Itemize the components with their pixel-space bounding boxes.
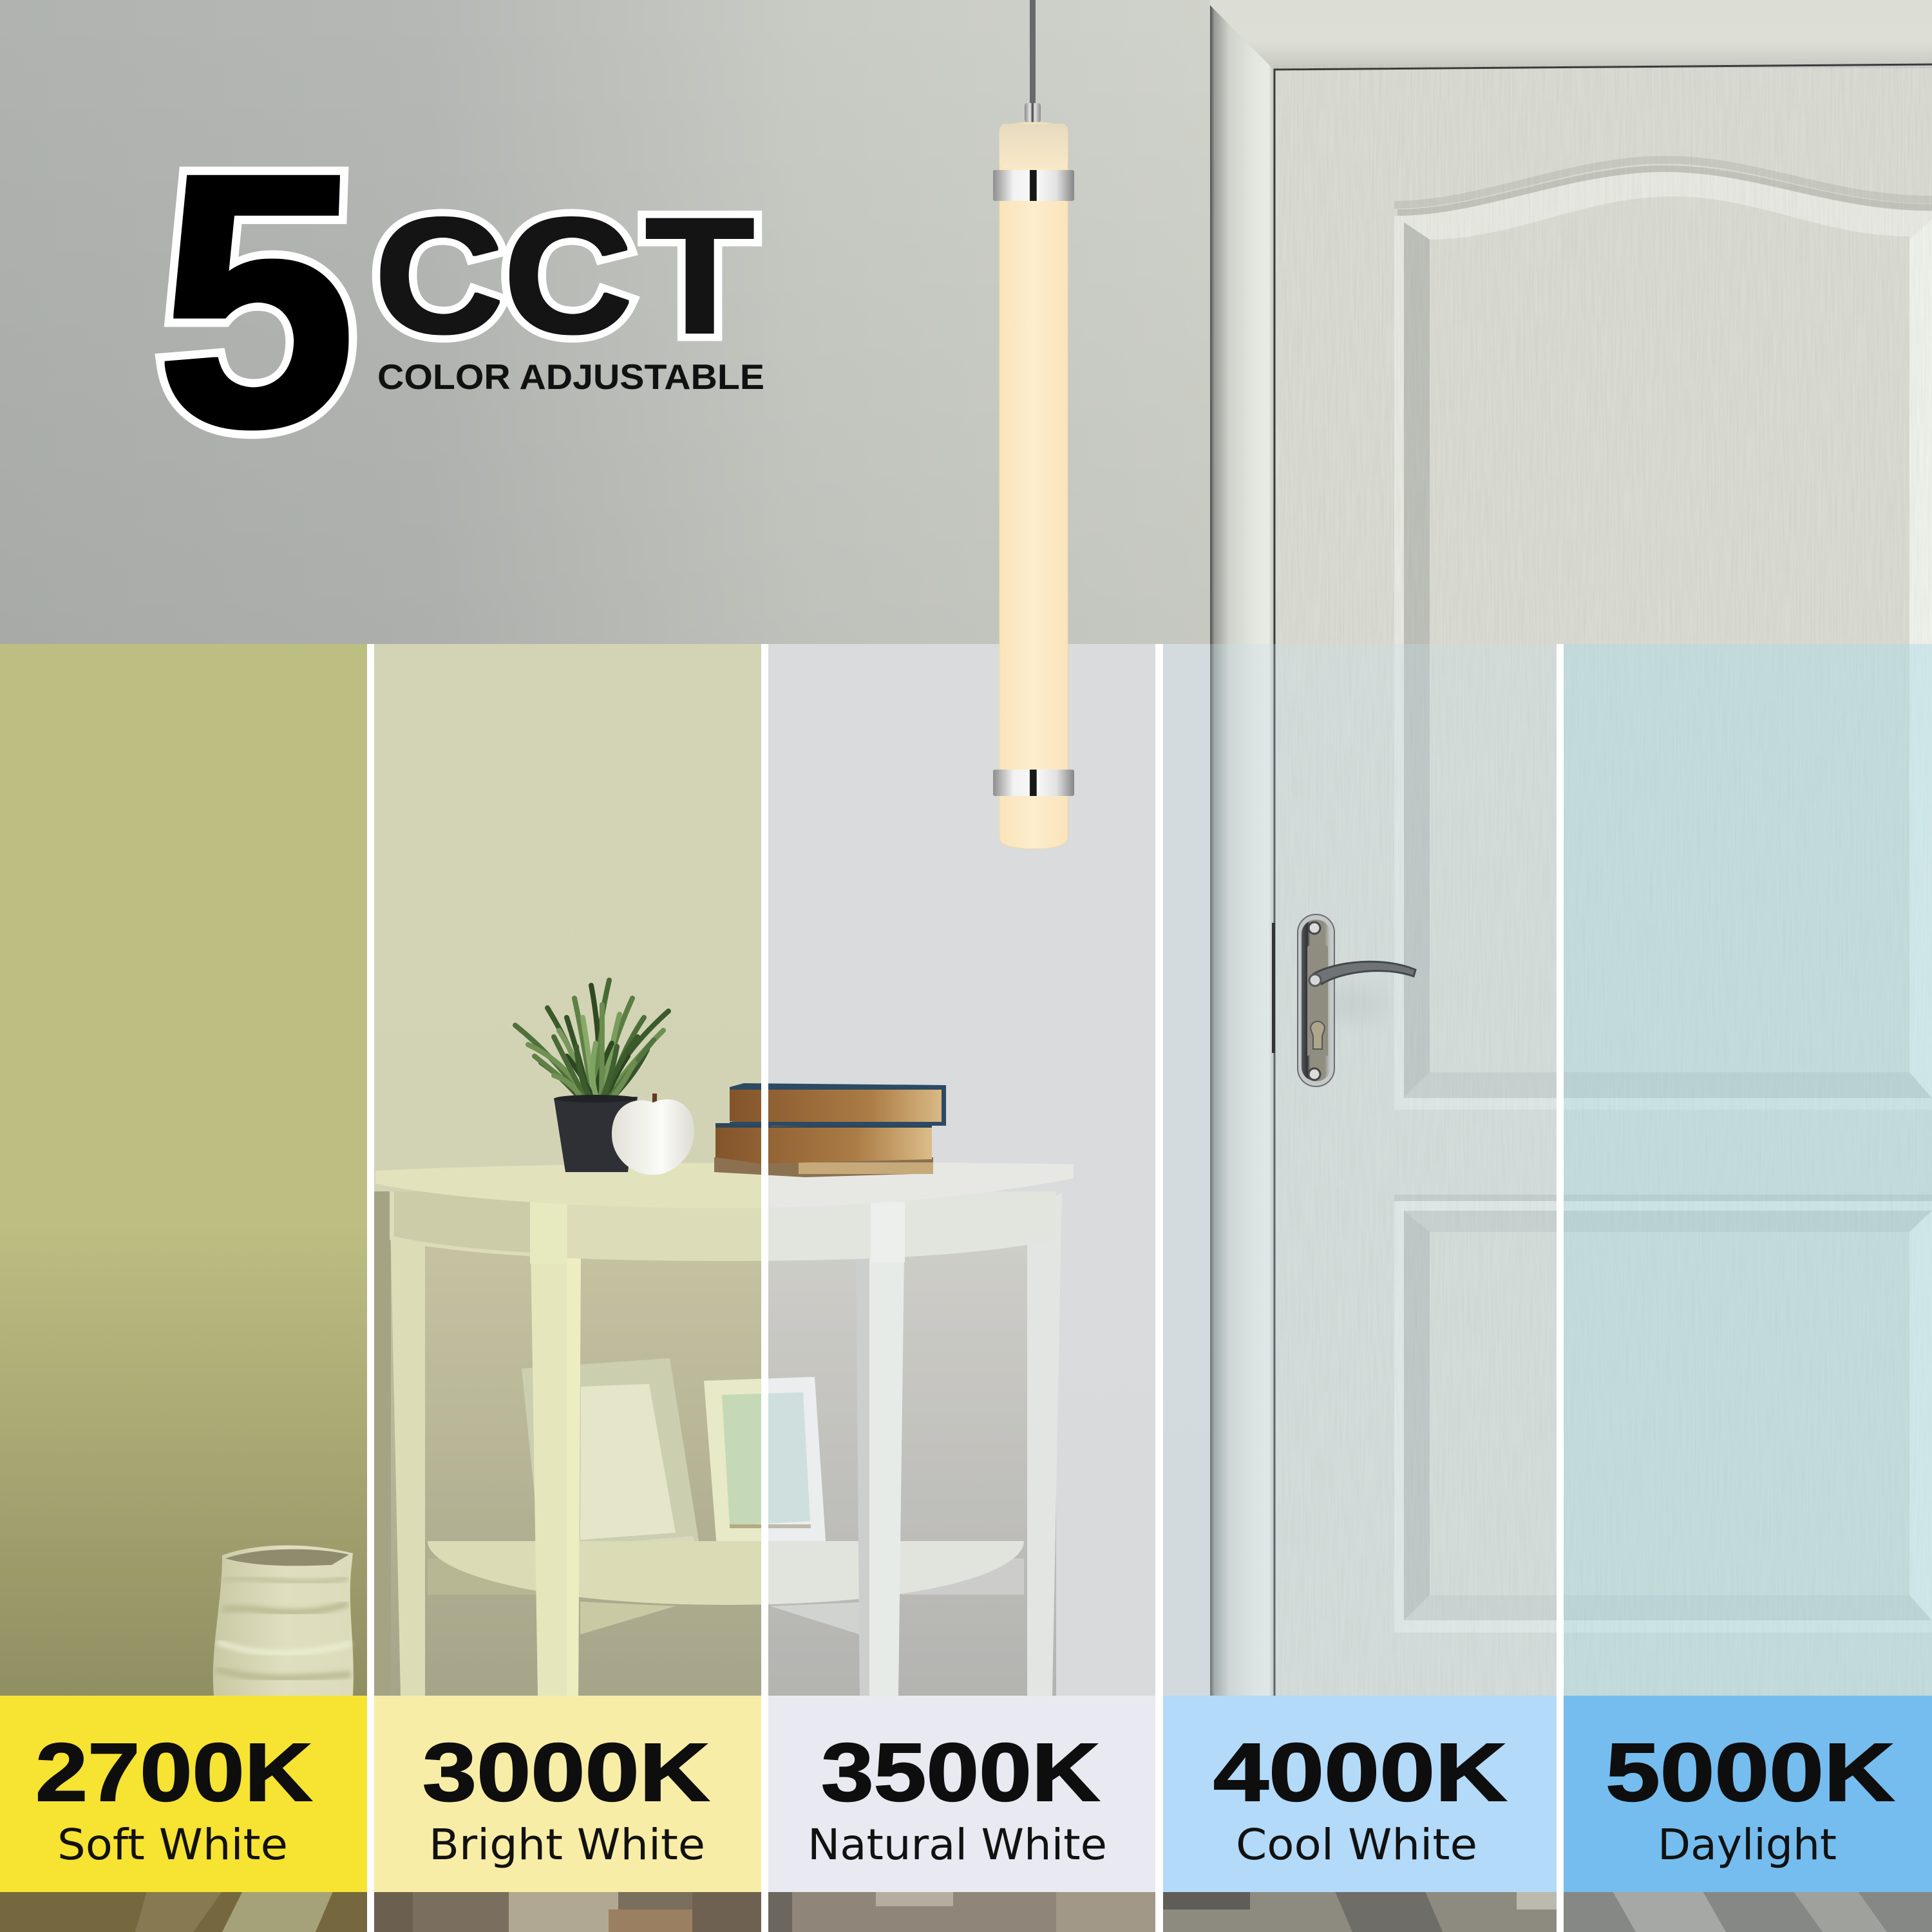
framed picture: white stand frame bbox=[704, 1377, 827, 1565]
overlay: 3500K bbox=[768, 644, 1155, 1700]
cord bbox=[1030, 0, 1036, 104]
vase bbox=[213, 1546, 354, 1696]
glass tube bbox=[999, 122, 1068, 849]
pendant light bbox=[993, 0, 1074, 849]
top ring bbox=[993, 170, 1074, 201]
bar 5000K bbox=[1564, 1696, 1932, 1892]
framed picture: silver frame bbox=[522, 1358, 701, 1568]
numeral 5: 5 bbox=[151, 99, 365, 502]
bar 3000K: 3000K bbox=[422, 1727, 710, 1819]
bar 3500K: Natural White bbox=[808, 1820, 1107, 1870]
overlay: 4000K bbox=[1163, 644, 1557, 1700]
table top bbox=[375, 1162, 1074, 1208]
CCT: CCT bbox=[374, 184, 755, 367]
handle shadow bbox=[1323, 987, 1388, 1023]
book 1 bbox=[730, 1088, 946, 1126]
bar 3000K bbox=[374, 1696, 761, 1892]
floor bbox=[0, 1887, 1932, 1932]
overlay: 5000K bbox=[1564, 644, 1932, 1700]
lower shelf bbox=[428, 1541, 1024, 1605]
blades bbox=[515, 980, 668, 1098]
table under-shadow on wall bbox=[390, 1243, 1056, 1700]
door leaf bbox=[1274, 68, 1932, 1700]
legs bbox=[390, 1193, 1062, 1696]
canopy cap bbox=[1025, 103, 1041, 122]
overlay: 2700K bbox=[0, 644, 367, 1700]
frame header bbox=[1210, 0, 1932, 70]
apron bbox=[390, 1191, 1056, 1261]
bar 4000K: Cool White bbox=[1236, 1820, 1477, 1870]
shelf brace bbox=[580, 1602, 676, 1634]
bar 3500K bbox=[768, 1696, 1155, 1892]
door handle bbox=[1272, 914, 1416, 1086]
colour temperature overlays bbox=[0, 644, 1932, 1700]
wood grain texture bbox=[1274, 68, 1932, 1700]
bar 3500K: 3500K bbox=[821, 1727, 1100, 1819]
bar 4000K bbox=[1163, 1696, 1557, 1892]
background: wall bbox=[0, 0, 1224, 1700]
book 2 bbox=[715, 1122, 932, 1164]
bar 4000K: 4000K bbox=[1213, 1727, 1507, 1819]
bar 2700K: 2700K bbox=[35, 1727, 312, 1819]
stacked books bbox=[714, 1083, 946, 1177]
bar 3000K: Bright White bbox=[429, 1820, 705, 1870]
shelf back strips bbox=[428, 1558, 1024, 1595]
frame casing left bbox=[1210, 5, 1274, 1700]
bar 5000K: Daylight bbox=[1658, 1820, 1837, 1870]
book 3 bbox=[714, 1157, 933, 1177]
heading: 5 CCT Color Adjustable bbox=[151, 99, 764, 502]
upper panel bbox=[1394, 160, 1932, 1110]
bar 5000K: 5000K bbox=[1605, 1727, 1895, 1819]
bar 2700K bbox=[0, 1696, 367, 1892]
door edge lines bbox=[1274, 64, 1932, 1700]
door frame and door bbox=[1210, 0, 1932, 1700]
console table bbox=[374, 1162, 1074, 1700]
shade near floor: 2700K bbox=[0, 1224, 367, 1700]
colour swatch bars bbox=[0, 1696, 1932, 1892]
pot bbox=[554, 1097, 638, 1172]
plant in pot bbox=[515, 980, 668, 1172]
bar 2700K: Soft White bbox=[57, 1820, 288, 1870]
overlay: 3000K bbox=[374, 644, 761, 1700]
white column dividers bbox=[367, 644, 1564, 1932]
bottom ring bbox=[993, 770, 1074, 796]
subtitle: COLOR ADJUSTABLE bbox=[377, 357, 764, 397]
lower panel bbox=[1394, 1195, 1932, 1633]
apple ornament bbox=[612, 1094, 694, 1175]
